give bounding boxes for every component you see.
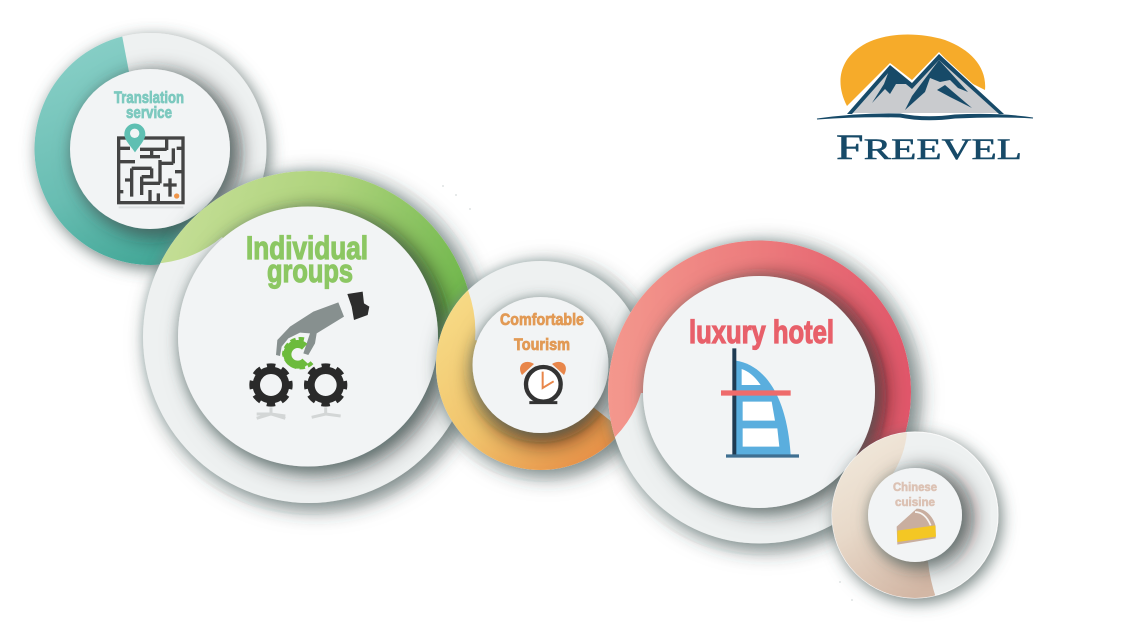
orange arc <box>436 290 616 470</box>
inner disc <box>643 276 875 508</box>
heading: chinese cuisine: cuisine <box>895 495 935 509</box>
heading: translation service: Translation <box>114 88 184 107</box>
logo sun <box>840 35 985 106</box>
heading: luxury hotel: luxury hotel <box>689 314 834 350</box>
icon: cake slice <box>897 509 936 545</box>
icon: alarm clock <box>520 362 566 403</box>
inner disc <box>178 206 438 466</box>
heading: individual groups: groups <box>267 253 353 289</box>
icon: hand placing gear <box>252 292 369 418</box>
icon: maze with pin <box>117 123 184 207</box>
beige arc <box>832 432 936 598</box>
inner disc <box>70 69 230 229</box>
inner disc <box>868 468 962 562</box>
panel: individual groups <box>143 150 490 503</box>
heading: comfortable tourism: Tourism <box>514 335 570 354</box>
heading: chinese cuisine <box>893 480 937 509</box>
teal arc <box>34 36 206 265</box>
panel: translation service <box>20 30 266 300</box>
logo wordmark: F REEVEL <box>836 127 1022 167</box>
heading: comfortable tourism: Comfortable <box>500 310 584 329</box>
heading: individual groups: Individual <box>246 230 368 266</box>
heading: chinese cuisine: Chinese <box>893 480 937 494</box>
panel: chinese cuisine <box>820 432 998 610</box>
inner disc <box>472 297 608 433</box>
logo mountains <box>817 54 1033 120</box>
heading: comfortable tourism <box>500 310 584 354</box>
icon: sail hotel tower <box>721 348 799 456</box>
heading: translation service: service <box>126 103 172 122</box>
panel: comfortable tourism <box>420 261 660 480</box>
heading: individual groups <box>246 230 368 289</box>
decorative specks <box>442 185 853 601</box>
green arc <box>160 171 468 340</box>
heading: translation service <box>114 88 184 122</box>
panel: luxury hotel <box>600 230 930 544</box>
red arc <box>608 240 911 457</box>
logo: Freevel <box>817 35 1033 167</box>
